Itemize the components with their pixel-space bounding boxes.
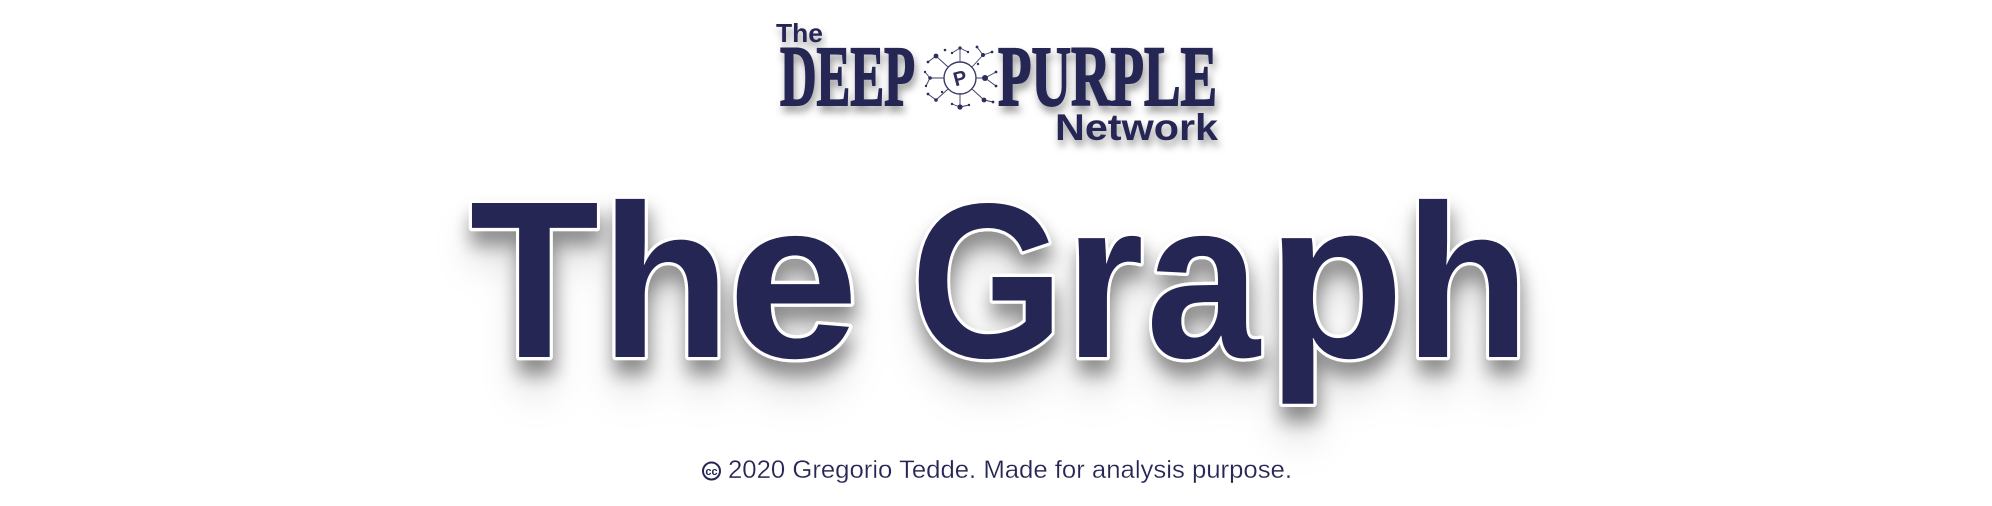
title: The Graph: a [1146, 153, 1261, 405]
title: The Graph: T [470, 156, 599, 405]
logo word: The: The [776, 18, 823, 48]
icon: creative commons [703, 462, 720, 480]
title: The Graph: r [1065, 154, 1144, 405]
title: The Graph: G [911, 159, 1064, 404]
title: The Graph: h [601, 159, 731, 404]
icon: creative commons: cc [705, 466, 718, 478]
logo word: PURPLE: PURPLE [998, 28, 1217, 124]
footer: copyright line [703, 456, 1292, 484]
title: The Graph: p [1267, 153, 1404, 405]
title: The Graph: h [1405, 159, 1530, 403]
logo word: Network: Network [1055, 107, 1218, 148]
icon: network emblem: P [951, 67, 970, 91]
logo word: DEEP: DEEP [780, 28, 915, 124]
title: The Graph [470, 153, 1530, 405]
logo: The Deep Purple Network [776, 18, 1218, 148]
icon: network emblem [924, 46, 997, 110]
title: The Graph: e [728, 153, 859, 405]
footer text: 2020 Gregorio Tedde. Made for analysis purpose. [728, 456, 1292, 484]
